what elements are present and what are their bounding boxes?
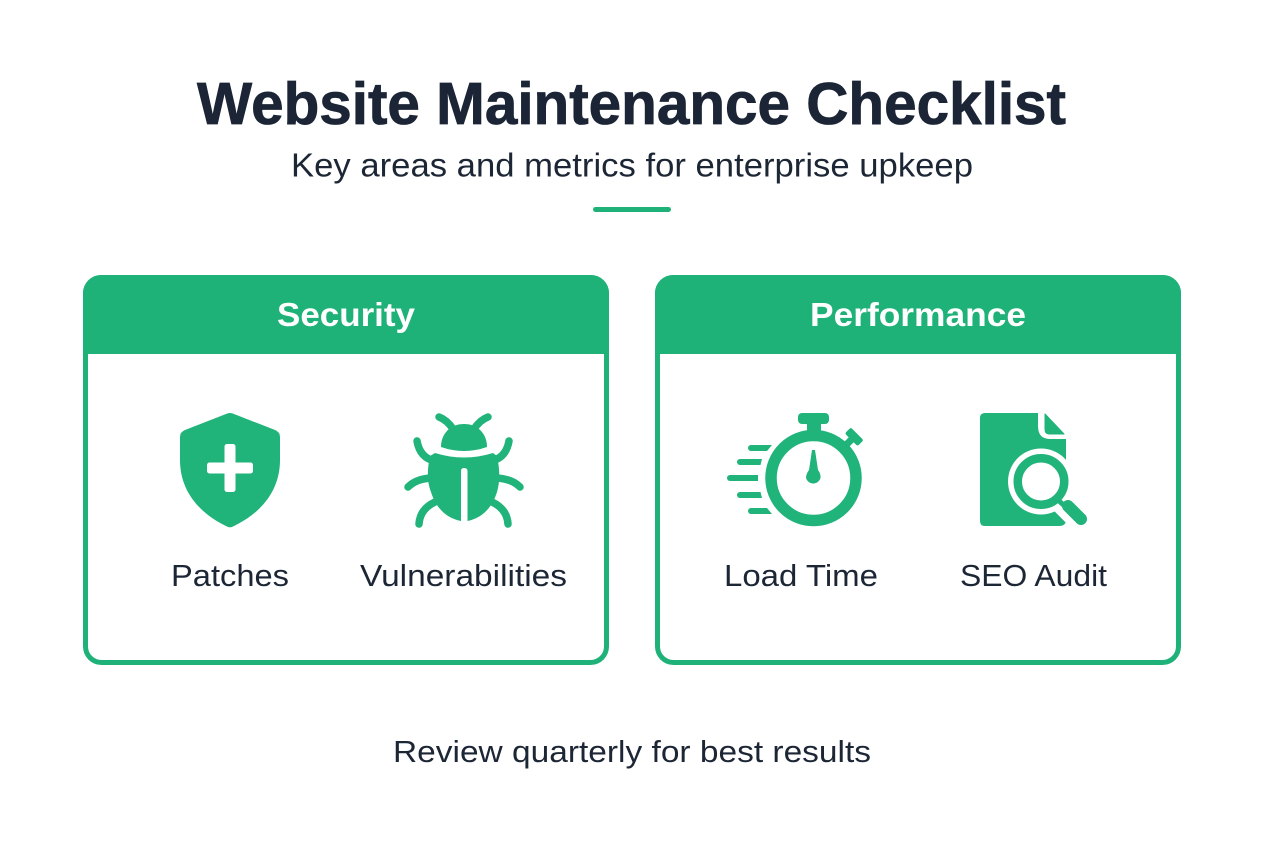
label: load time: Load Time bbox=[724, 558, 878, 593]
footer note: Review quarterly for best results bbox=[393, 734, 871, 769]
accent bar bbox=[593, 207, 671, 212]
subtitle: Key areas and metrics for enterprise upkeep bbox=[291, 146, 973, 184]
panel: security bbox=[83, 275, 609, 662]
panel heading: security: Security bbox=[277, 296, 416, 333]
title: Website Maintenance Checklist bbox=[197, 71, 1066, 137]
label: seo audit: SEO Audit bbox=[960, 558, 1107, 593]
panel frame: security bbox=[86, 278, 606, 662]
icon: stopwatch with speed lines bbox=[727, 413, 864, 520]
label: patches: Patches bbox=[171, 558, 289, 593]
panel: performance bbox=[655, 275, 1181, 662]
panel heading: performance: Performance bbox=[810, 296, 1026, 333]
panel frame: performance bbox=[658, 278, 1178, 662]
icon: bug bbox=[408, 417, 520, 524]
panel header: performance bbox=[655, 275, 1181, 354]
icon: document with magnifier bbox=[980, 413, 1086, 528]
panel header: security bbox=[83, 275, 609, 354]
icon: shield with plus bbox=[180, 413, 280, 527]
label: vulnerabilities: Vulnerabilities bbox=[360, 558, 567, 593]
